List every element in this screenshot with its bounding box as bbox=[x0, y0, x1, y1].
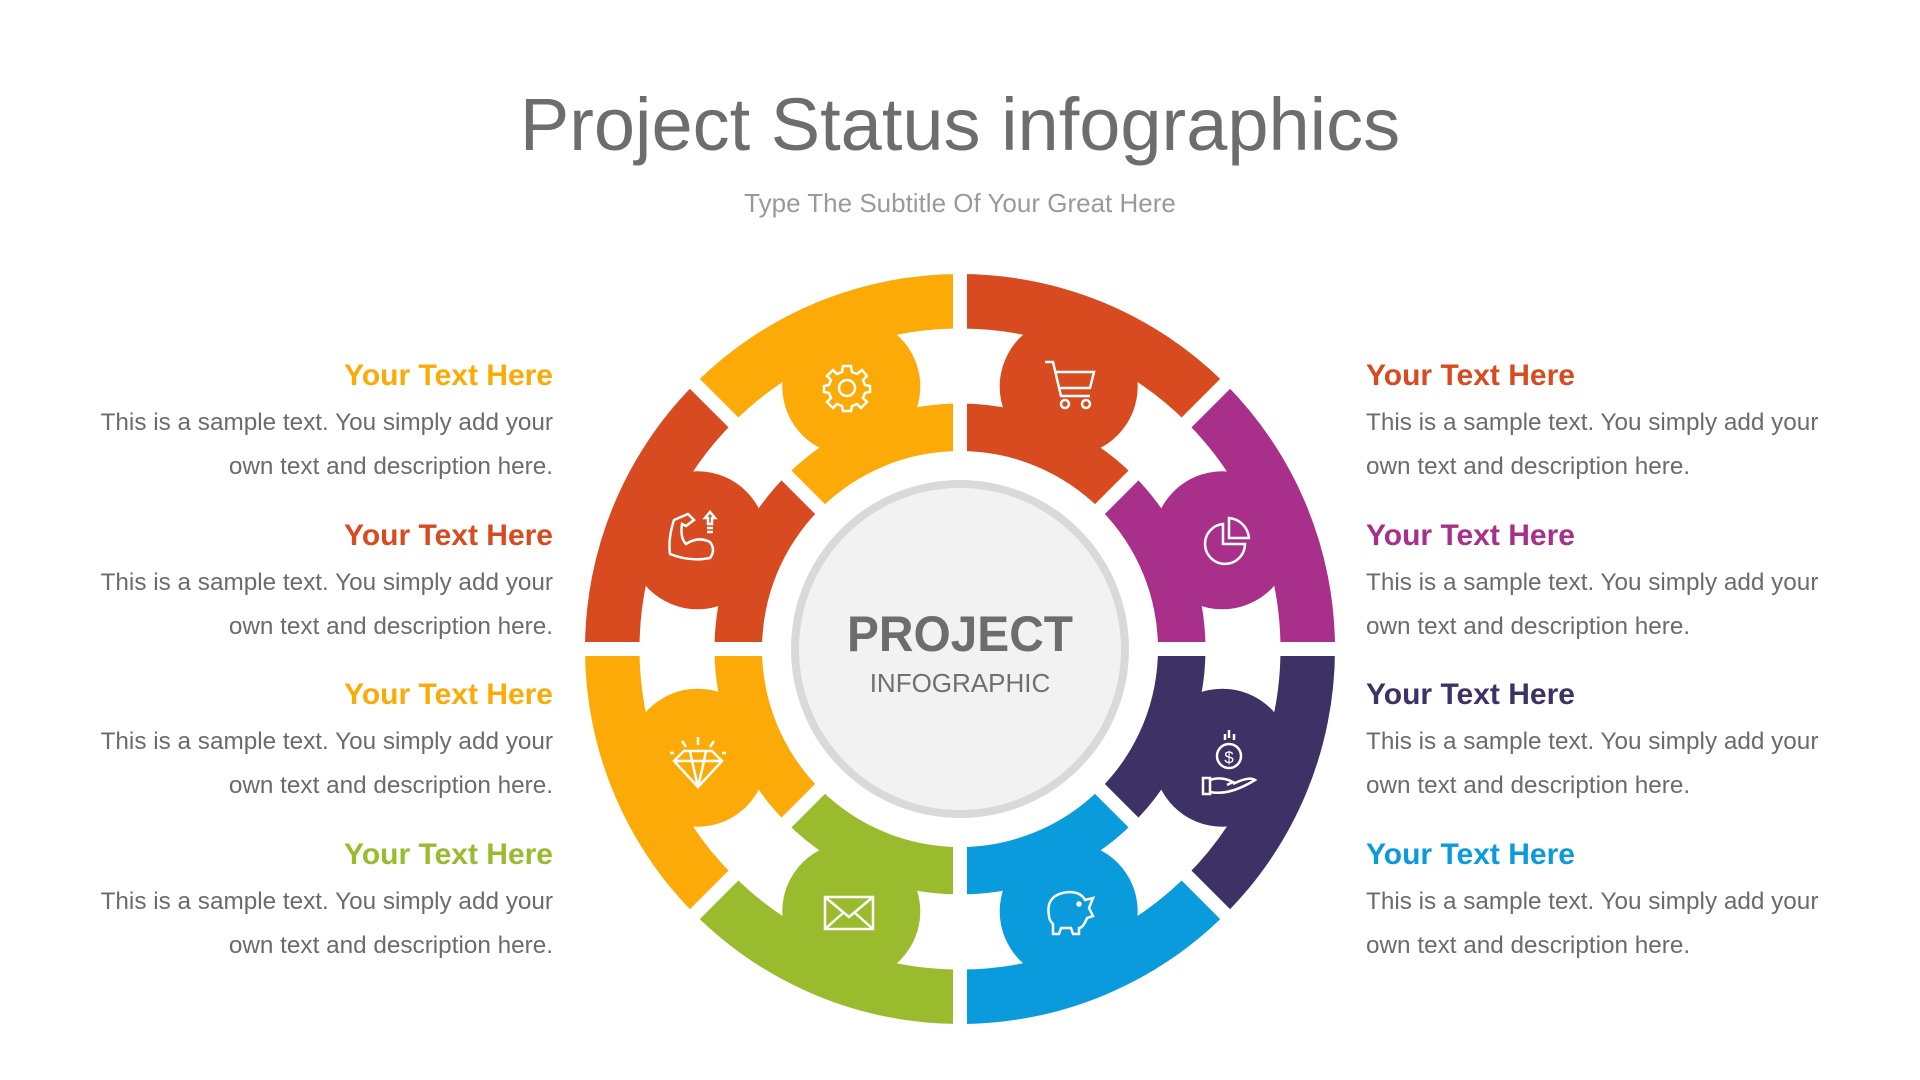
text block: right 2 bbox=[1366, 519, 1818, 640]
center circle: PROJECT bbox=[847, 606, 1073, 662]
subtitle: Type The Subtitle Of Your Great Here bbox=[744, 188, 1176, 218]
icon: envelope bbox=[825, 897, 873, 929]
text block: right 2: own text and description here. bbox=[1366, 613, 1690, 640]
text block: left 1 bbox=[101, 359, 553, 480]
text block: left 3: Your Text Here bbox=[344, 678, 553, 711]
text block: left 4: own text and description here. bbox=[229, 932, 553, 959]
center circle: INFOGRAPHIC bbox=[870, 668, 1050, 698]
text block: right 3: own text and description here. bbox=[1366, 772, 1690, 799]
text block: left 4 bbox=[101, 838, 553, 959]
text block: left 2: This is a sample text. You simply add your bbox=[101, 569, 553, 596]
text block: left 1: own text and description here. bbox=[229, 453, 553, 480]
text block: left 2 bbox=[101, 519, 553, 640]
text block: right 4: own text and description here. bbox=[1366, 932, 1690, 959]
icon: cart bbox=[1045, 362, 1094, 408]
text block: left 1: This is a sample text. You simply add your bbox=[101, 409, 553, 436]
text block: right 1: own text and description here. bbox=[1366, 453, 1690, 480]
text block: right 2: Your Text Here bbox=[1366, 519, 1575, 552]
center circle bbox=[795, 484, 1125, 814]
icon: muscle bbox=[670, 512, 715, 559]
text block: right 3: This is a sample text. You simply add your bbox=[1366, 728, 1818, 755]
text block: right 1: This is a sample text. You simply add your bbox=[1366, 409, 1818, 436]
icon: diamond bbox=[670, 737, 726, 787]
icon: gear bbox=[824, 366, 870, 411]
text block: left 3: This is a sample text. You simply add your bbox=[101, 728, 553, 755]
text block: right 2: This is a sample text. You simply add your bbox=[1366, 569, 1818, 596]
text block: right 4: This is a sample text. You simply add your bbox=[1366, 888, 1818, 915]
icon: money hand bbox=[1203, 730, 1255, 794]
text block: left 1: Your Text Here bbox=[344, 359, 553, 392]
text block: left 2: own text and description here. bbox=[229, 613, 553, 640]
text block: left 3 bbox=[101, 678, 553, 799]
icon: piggy bank bbox=[1048, 892, 1093, 934]
text block: right 1 bbox=[1366, 359, 1818, 480]
icon bubbles bbox=[629, 318, 1291, 980]
text block: left 2: Your Text Here bbox=[344, 519, 553, 552]
text block: right 1: Your Text Here bbox=[1366, 359, 1575, 392]
icon: money hand: $ bbox=[1224, 748, 1234, 767]
text block: left 4: This is a sample text. You simply add your bbox=[101, 888, 553, 915]
text block: left 3: own text and description here. bbox=[229, 772, 553, 799]
text block: left 4: Your Text Here bbox=[344, 838, 553, 871]
ring segments bbox=[560, 250, 1360, 1050]
title: Project Status infographics bbox=[520, 83, 1400, 166]
text block: right 3: Your Text Here bbox=[1366, 678, 1575, 711]
text block: right 4 bbox=[1366, 838, 1818, 959]
icon: pie chart bbox=[1205, 518, 1249, 564]
text block: right 4: Your Text Here bbox=[1366, 838, 1575, 871]
text block: right 3 bbox=[1366, 678, 1818, 799]
